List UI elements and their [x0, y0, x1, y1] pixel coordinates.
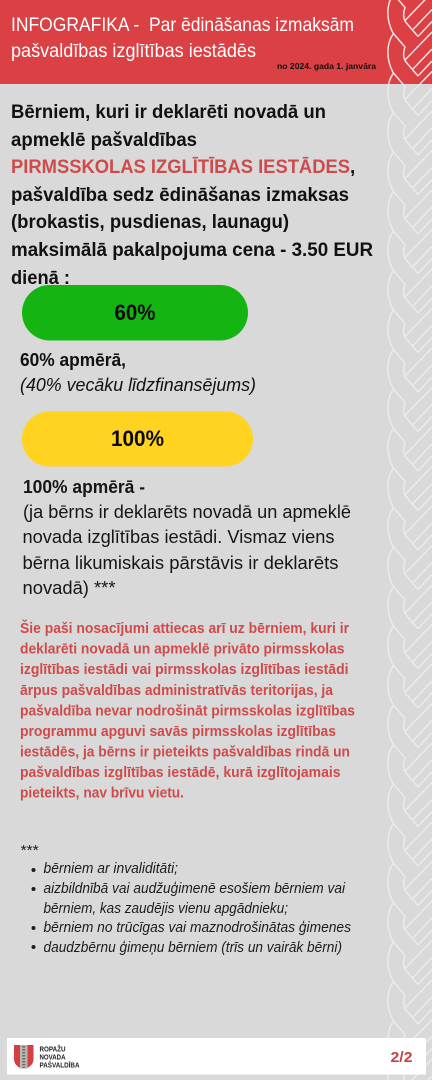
100% description: novada izglītības iestādi. Vismaz viens — [22, 527, 335, 547]
title — [11, 15, 354, 62]
braid pattern: body — [388, 0, 432, 1080]
red conditions text block — [20, 619, 355, 802]
date note: no 2024. gada 1. janvāra — [277, 62, 377, 71]
100% description: bērna likumiskais pārstāvis ir deklarēts — [22, 553, 338, 573]
red conditions text block: izglītības iestādi vai pirmsskolas izglītības iestādi — [20, 662, 348, 678]
badge: 100%: 100% — [111, 426, 164, 451]
icon: municipal shield logo — [14, 1045, 34, 1068]
footnote list: aizbildnībā vai audžuģimenē esošiem bērniem vai — [44, 881, 346, 897]
intro text block: , — [350, 157, 355, 178]
logo wordmark: ROPAŽU — [40, 1044, 66, 1054]
red conditions text block: programmu apguvi savās pirmsskolas izglītības — [20, 724, 336, 740]
red conditions text block: deklarēti novadā un apmeklē privāto pirmsskolas — [20, 642, 344, 658]
title: pašvaldības izglītības iestādēs — [11, 41, 256, 62]
red conditions text block: iestādēs, ja bērns ir pieteikts pašvaldības rindā un — [20, 744, 350, 760]
60% description: (40% vecāku līdzfinansējums) — [20, 375, 256, 395]
intro text block: (brokastis, pusdienas, launagu) — [11, 212, 289, 233]
logo wordmark: PAŠVALDĪBA — [40, 1060, 80, 1070]
red conditions text block: Šie paši nosacījumi attiecas arī uz bērniem, kuri ir — [20, 619, 349, 637]
page number: 2/2 — [390, 1049, 412, 1066]
badge: 60% — [22, 285, 248, 340]
badge: 60%: 60% — [114, 300, 156, 325]
header band — [0, 0, 432, 84]
intro text block: Bērniem, kuri ir deklarēti novadā un — [11, 102, 326, 123]
red conditions text block: pašvaldības izglītības iestādē, kurā izglītojamais — [20, 765, 340, 781]
footer bar — [7, 1038, 426, 1074]
intro text block: dienā : — [11, 268, 70, 289]
footnote list: daudzbērnu ģimeņu bērniem (trīs un vairāk bērni) — [44, 940, 342, 956]
100% description: novadā) *** — [22, 578, 116, 598]
logo wordmark: NOVADA — [40, 1054, 66, 1062]
intro text block: PIRMSSKOLAS IZGLĪTĪBAS IESTĀDES — [11, 157, 350, 178]
intro text block — [11, 102, 373, 289]
60% description — [20, 350, 256, 395]
100% description: 100% apmērā - — [23, 477, 145, 497]
red conditions text block: pašvaldība nevar nodrošināt pirmsskolas izglītības — [20, 704, 355, 720]
logo wordmark — [40, 1044, 80, 1070]
60% description: 60% apmērā, — [20, 350, 126, 370]
title: INFOGRAFIKA - Par ēdināšanas izmaksām — [11, 15, 354, 36]
intro text block: maksimālā pakalpojuma cena - 3.50 EUR — [11, 240, 373, 261]
red conditions text block: ārpus pašvaldības administratīvās teritorijas, ja — [20, 683, 334, 699]
footnote list: bērniem, kas zaudējis vienu apgādnieku; — [44, 901, 288, 917]
footnote list: bērniem no trūcīgas vai maznodrošinātas ģimenes — [44, 920, 351, 936]
footnote list — [20, 843, 351, 956]
braid pattern: header — [387, 0, 432, 84]
red conditions text block: pieteikts, nav brīvu vietu. — [20, 786, 184, 802]
badge: 100% — [22, 412, 253, 466]
intro text block: apmeklē pašvaldības — [11, 130, 197, 151]
footnote list: *** — [20, 843, 39, 859]
footnote list: bērniem ar invaliditāti; — [44, 861, 178, 877]
100% description — [22, 477, 351, 598]
100% description: (ja bērns ir deklarēts novadā un apmeklē — [23, 502, 351, 522]
intro text block: pašvaldība sedz ēdināšanas izmaksas — [11, 185, 349, 206]
